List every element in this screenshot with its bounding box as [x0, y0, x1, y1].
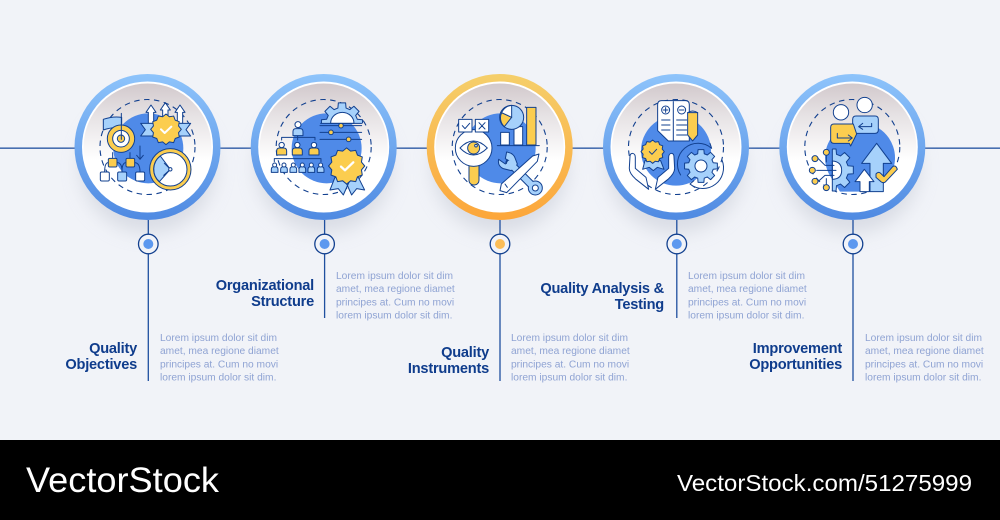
footer logo: VectorStock — [26, 461, 220, 500]
icon: inspection, chart and tools — [455, 105, 542, 195]
text: quality instruments body: principes at. Cum no movi — [511, 359, 629, 370]
heading: organizational structure: Organizational — [216, 278, 314, 294]
heading: improvement opportunities: Opportunities — [749, 357, 842, 373]
text: quality analysis body: lorem ipsum dolor sit dim. — [688, 311, 804, 322]
text: improvement opportunities body: principes at. Cum no movi — [865, 359, 983, 370]
text: quality instruments body: Lorem ipsum dolor sit dim — [511, 333, 628, 344]
connector: improvement opportunities — [843, 220, 863, 381]
panel: quality analysis and testing — [603, 74, 749, 233]
text: quality objectives body: principes at. Cum no movi — [160, 359, 278, 370]
heading: quality instruments: Instruments — [408, 361, 489, 377]
heading: quality analysis and testing: Quality Analysis & — [540, 281, 665, 297]
text: organizational structure body: amet, mea regione diamet — [336, 284, 455, 295]
text: quality instruments body: lorem ipsum dolor sit dim. — [511, 373, 627, 384]
text: quality analysis body: principes at. Cum no movi — [688, 297, 806, 308]
panel: improvement opportunities — [779, 74, 925, 233]
heading: improvement opportunities: Improvement — [753, 341, 842, 357]
footer url: VectorStock.com/51275999 — [677, 470, 972, 496]
text: quality analysis body: Lorem ipsum dolor sit dim — [688, 271, 805, 282]
connector: quality instruments — [490, 220, 510, 381]
text: quality objectives body: lorem ipsum dolor sit dim. — [160, 373, 276, 384]
text: organizational structure body: lorem ipsum dolor sit dim. — [336, 311, 452, 322]
panel: quality instruments — [427, 74, 573, 233]
heading: quality objectives: Quality — [89, 341, 138, 357]
text: improvement opportunities body: lorem ipsum dolor sit dim. — [865, 373, 981, 384]
connector: organizational structure — [315, 220, 334, 318]
icon: targets, flow chart, badge and clock — [100, 103, 191, 190]
text: improvement opportunities body: Lorem ipsum dolor sit dim — [865, 333, 982, 344]
icon: people, circuit gear and growth arrows — [809, 97, 897, 192]
footer band — [0, 440, 1000, 520]
panel: organizational structure — [251, 74, 397, 233]
panel: quality objectives — [74, 74, 220, 233]
text: improvement opportunities body: amet, mea regione diamet — [865, 346, 984, 357]
timeline line — [0, 148, 1000, 149]
text: quality instruments body: amet, mea regione diamet — [511, 346, 630, 357]
heading: quality objectives: Objectives — [65, 357, 137, 373]
heading: organizational structure: Structure — [251, 294, 314, 310]
text: quality objectives body: amet, mea regione diamet — [160, 346, 279, 357]
text: organizational structure body: Lorem ipsum dolor sit dim — [336, 271, 453, 282]
icon: document, hands, award and gear — [629, 101, 724, 189]
text: quality objectives body: Lorem ipsum dolor sit dim — [160, 333, 277, 344]
icon: hierarchy, gear, sliders and award — [271, 103, 365, 195]
text: quality analysis body: amet, mea regione diamet — [688, 284, 807, 295]
heading: quality instruments: Quality — [441, 345, 490, 361]
connector: quality analysis — [667, 220, 687, 318]
connector: quality objectives — [138, 220, 158, 381]
heading: quality analysis and testing: Testing — [615, 297, 664, 313]
text: organizational structure body: principes at. Cum no movi — [336, 297, 454, 308]
